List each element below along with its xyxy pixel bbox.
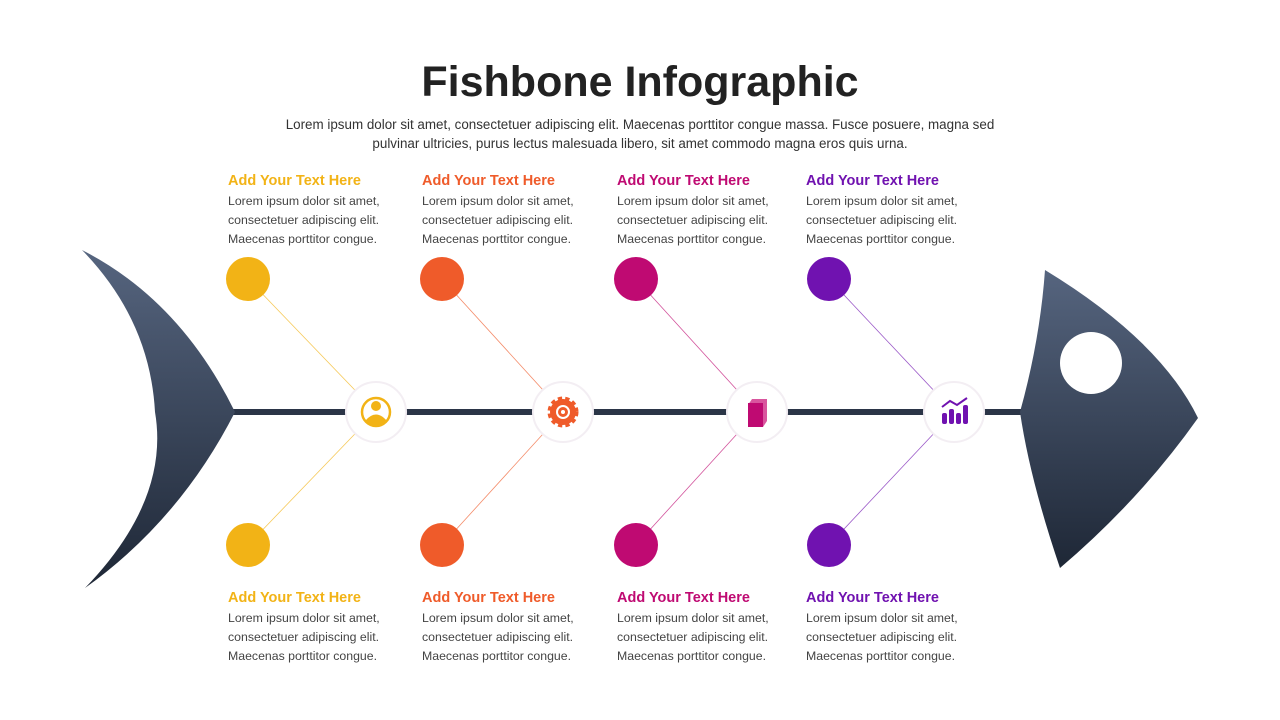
icon: chart: [942, 398, 968, 424]
icon: user: [362, 398, 390, 426]
hubs: [346, 382, 984, 442]
text blocks bottom: Lorem ipsum dolor sit amet, consectetuer adipiscing elit. Maecenas porttitor congue.: [228, 611, 380, 663]
text block: Add Your Text Here: [617, 173, 750, 189]
text blocks top: Lorem ipsum dolor sit amet, consectetuer adipiscing elit. Maecenas porttitor congue.: [228, 194, 380, 246]
text block: Add Your Text Here: [617, 590, 750, 606]
text block: Lorem ipsum dolor sit amet, consectetuer adipiscing elit. Maecenas porttitor congue.: [806, 611, 958, 663]
head: [1020, 270, 1198, 568]
text block: Lorem ipsum dolor sit amet, consectetuer adipiscing elit. Maecenas porttitor congue.: [422, 611, 574, 663]
text block: Lorem ipsum dolor sit amet, consectetuer adipiscing elit. Maecenas porttitor congue.: [422, 194, 574, 246]
bones: [248, 279, 954, 545]
title: Fishbone Infographic: [421, 58, 859, 106]
text block: Lorem ipsum dolor sit amet, consectetuer adipiscing elit. Maecenas porttitor congue.: [617, 194, 769, 246]
text blocks bottom: Add Your Text Here: [228, 590, 361, 606]
icon: gear: [550, 399, 576, 425]
subtitle: Lorem ipsum dolor sit amet, consectetuer adipiscing elit. Maecenas porttitor congue massa. Fusce posuere, magna sed pulvinar ultricies, purus lectus malesuada libero, sit amet commodo magna eros quis urna.: [286, 117, 994, 151]
text block: Lorem ipsum dolor sit amet, consectetuer adipiscing elit. Maecenas porttitor congue.: [617, 611, 769, 663]
icon: document: [748, 399, 767, 427]
text blocks top: Add Your Text Here: [228, 173, 361, 189]
text block: Add Your Text Here: [422, 590, 555, 606]
text block: Add Your Text Here: [806, 173, 939, 189]
dots: [226, 257, 851, 567]
text block: Add Your Text Here: [806, 590, 939, 606]
tail: [82, 250, 235, 588]
spine: [225, 409, 1025, 415]
eye: [1060, 332, 1122, 394]
text block: Add Your Text Here: [422, 173, 555, 189]
text block: Lorem ipsum dolor sit amet, consectetuer adipiscing elit. Maecenas porttitor congue.: [806, 194, 958, 246]
